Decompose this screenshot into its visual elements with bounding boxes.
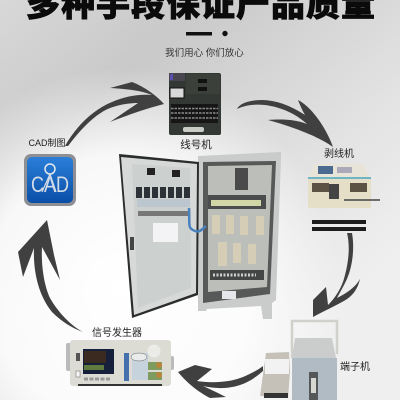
device: terminal machine: [292, 321, 337, 400]
door paper sheet: [153, 223, 178, 242]
arrow: wire stripper to terminal machine: [313, 233, 360, 317]
subtitle: 我们用心 你们放心: [165, 47, 244, 59]
device: label printer: [169, 73, 221, 135]
arrow: label printer to wire stripper: [237, 100, 333, 147]
terminal strip: [208, 195, 266, 209]
cabinet body: [198, 152, 281, 319]
arrow: terminal machine to signal generator: [178, 365, 263, 398]
arrow: CAD to label printer: [65, 82, 164, 146]
label: CAD drawing: CAD制图: [28, 137, 66, 148]
door latch: [130, 237, 134, 250]
title divider: dash and dot: [186, 31, 228, 36]
label: label printer: 线号机: [180, 138, 212, 151]
label: terminal machine: 端子机: [340, 360, 370, 373]
door: [119, 154, 199, 318]
door switches: [147, 168, 155, 175]
label: wire stripper: 剥线机: [324, 147, 354, 160]
label: signal generator: 信号发生器: [92, 326, 142, 339]
switches: [235, 168, 248, 190]
door meters: [136, 187, 190, 198]
inverters upper row: [212, 215, 220, 234]
device: CAD icon: [24, 154, 76, 206]
device: CAD icon: CAD: [31, 172, 69, 197]
lower terminal rail: [210, 270, 264, 280]
arrow: signal generator to CAD: [18, 220, 83, 332]
device: signal generator: [66, 340, 174, 386]
sample wires: [312, 220, 366, 224]
device: foot pedal: [260, 352, 290, 398]
inverters lower row: [218, 242, 227, 266]
door blue wires: [189, 208, 206, 231]
device: wire stripper: [308, 164, 380, 231]
control cabinet: [119, 152, 281, 319]
